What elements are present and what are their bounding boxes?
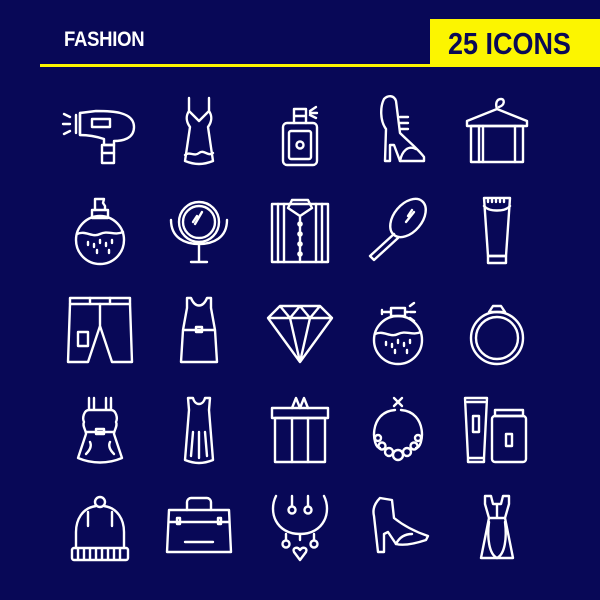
icon: spray bottle (283, 107, 317, 165)
icon: tube (484, 198, 510, 263)
icon: diamond (268, 306, 332, 362)
icon: sleeveless dress (481, 496, 513, 558)
icon: jewelry set (273, 496, 327, 560)
icon: top with belt (78, 398, 122, 462)
icon: long dress (185, 398, 213, 463)
icon: high heel shoe (373, 498, 428, 552)
icon: tube and jar (465, 398, 526, 462)
icon: slip dress (185, 98, 213, 164)
icon: ring (471, 306, 523, 364)
icon: atomizer perfume (374, 303, 422, 364)
icon: beanie (72, 497, 128, 560)
icon: dress with belt (181, 298, 217, 362)
title: FASHION (64, 28, 144, 51)
icon: boot (381, 96, 424, 161)
icon: towel on hanger (467, 99, 527, 162)
icon: gift box (272, 398, 328, 462)
icon: hair dryer (63, 111, 134, 163)
badge: 25 icons (430, 19, 600, 66)
icon: shirt (272, 200, 328, 262)
icon: handbag (167, 498, 231, 552)
icon: hand mirror (370, 192, 433, 260)
icon: necklace (374, 398, 422, 460)
icon: table mirror (171, 202, 227, 262)
icon: perfume bottle (76, 199, 124, 264)
header rule (40, 64, 600, 67)
badge: 25 icons: 25 ICONS (448, 26, 571, 61)
icon: shorts (68, 298, 132, 362)
